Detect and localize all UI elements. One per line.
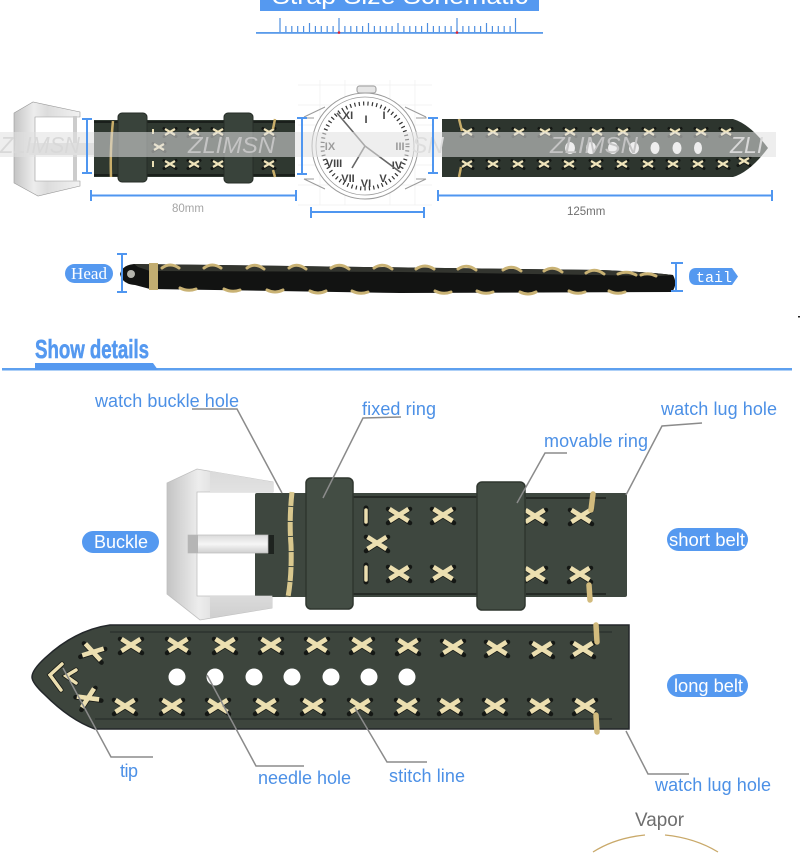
schematic: short strap: [94, 113, 295, 183]
pill: short belt: short belt: [669, 529, 745, 550]
stray dot: [798, 316, 800, 318]
schematic fixed ring: [118, 113, 147, 182]
movable ring: [477, 482, 525, 610]
watch numerals: XI: [343, 110, 353, 122]
belt X stitches: [366, 494, 593, 600]
watch numerals: [325, 110, 405, 190]
schematic: small buckle: [14, 102, 101, 196]
pill: Buckle: Buckle: [94, 532, 148, 552]
watermark band: ZLIMSN: [187, 132, 275, 158]
marker: Head: Head: [71, 264, 108, 283]
watch numerals: IV: [392, 160, 403, 172]
marker: tail: tail: [696, 270, 732, 287]
schematic: long strap: [442, 119, 768, 177]
pill: Buckle: [82, 531, 159, 553]
schematic movable ring: [224, 113, 253, 183]
watch numerals: VI: [361, 178, 371, 190]
section heading: Show details: Show details: [35, 334, 149, 364]
dimension markers: [82, 118, 772, 218]
label: 125mm: 125mm: [567, 206, 605, 218]
large buckle: [167, 469, 274, 620]
marker: Head: [65, 254, 127, 292]
schematic: watch drawing: [298, 80, 432, 205]
schematic short strap stitches: [111, 119, 275, 177]
buckle-side stitch: [288, 492, 292, 597]
label: needle hole: needle hole: [258, 768, 351, 788]
watch hands: [337, 113, 400, 172]
watermark band: ZLI: [729, 132, 764, 158]
ruler: [256, 18, 543, 34]
label: tip: tip: [120, 761, 138, 781]
watch numerals: IX: [325, 141, 336, 153]
watch numerals: VII: [341, 173, 355, 185]
section heading: Show details: [2, 334, 792, 370]
vapor label: [593, 809, 718, 852]
marker: tail: [671, 263, 738, 291]
fixed ring: [306, 478, 353, 609]
watch numerals: I: [382, 110, 386, 122]
side view strap: [120, 263, 675, 294]
label: watch buckle hole: watch buckle hole: [94, 391, 239, 411]
label: 80mm: 80mm: [172, 203, 204, 215]
watch numerals: III: [395, 141, 405, 153]
watermark band: SN: [412, 132, 444, 158]
label: watch lug hole top: watch lug hole: [660, 399, 777, 419]
long strap holes: [565, 142, 702, 154]
leader lines: [63, 409, 702, 774]
watch numerals: I: [364, 114, 368, 126]
label: watch lug hole bottom: watch lug hole: [654, 775, 771, 795]
label: fixed ring: fixed ring: [362, 399, 436, 419]
vapor label: Vapor: [635, 809, 684, 831]
side stitches: [162, 265, 656, 294]
long belt X stitches: [50, 625, 597, 732]
label: movable ring: movable ring: [544, 431, 648, 451]
long belt holes: [168, 668, 416, 686]
pill: long belt: long belt: [674, 675, 743, 696]
watch numerals: VIII: [326, 158, 342, 170]
large short belt: [255, 478, 627, 610]
label: stitch line: stitch line: [389, 766, 465, 786]
large long belt: [32, 625, 629, 732]
watermark band: ZLIMSN: [0, 132, 80, 158]
watermark band: [0, 132, 776, 158]
watch numerals: V: [379, 173, 387, 185]
watermark band: ZLIMSN: [549, 132, 638, 158]
long strap stitches: [459, 119, 750, 177]
